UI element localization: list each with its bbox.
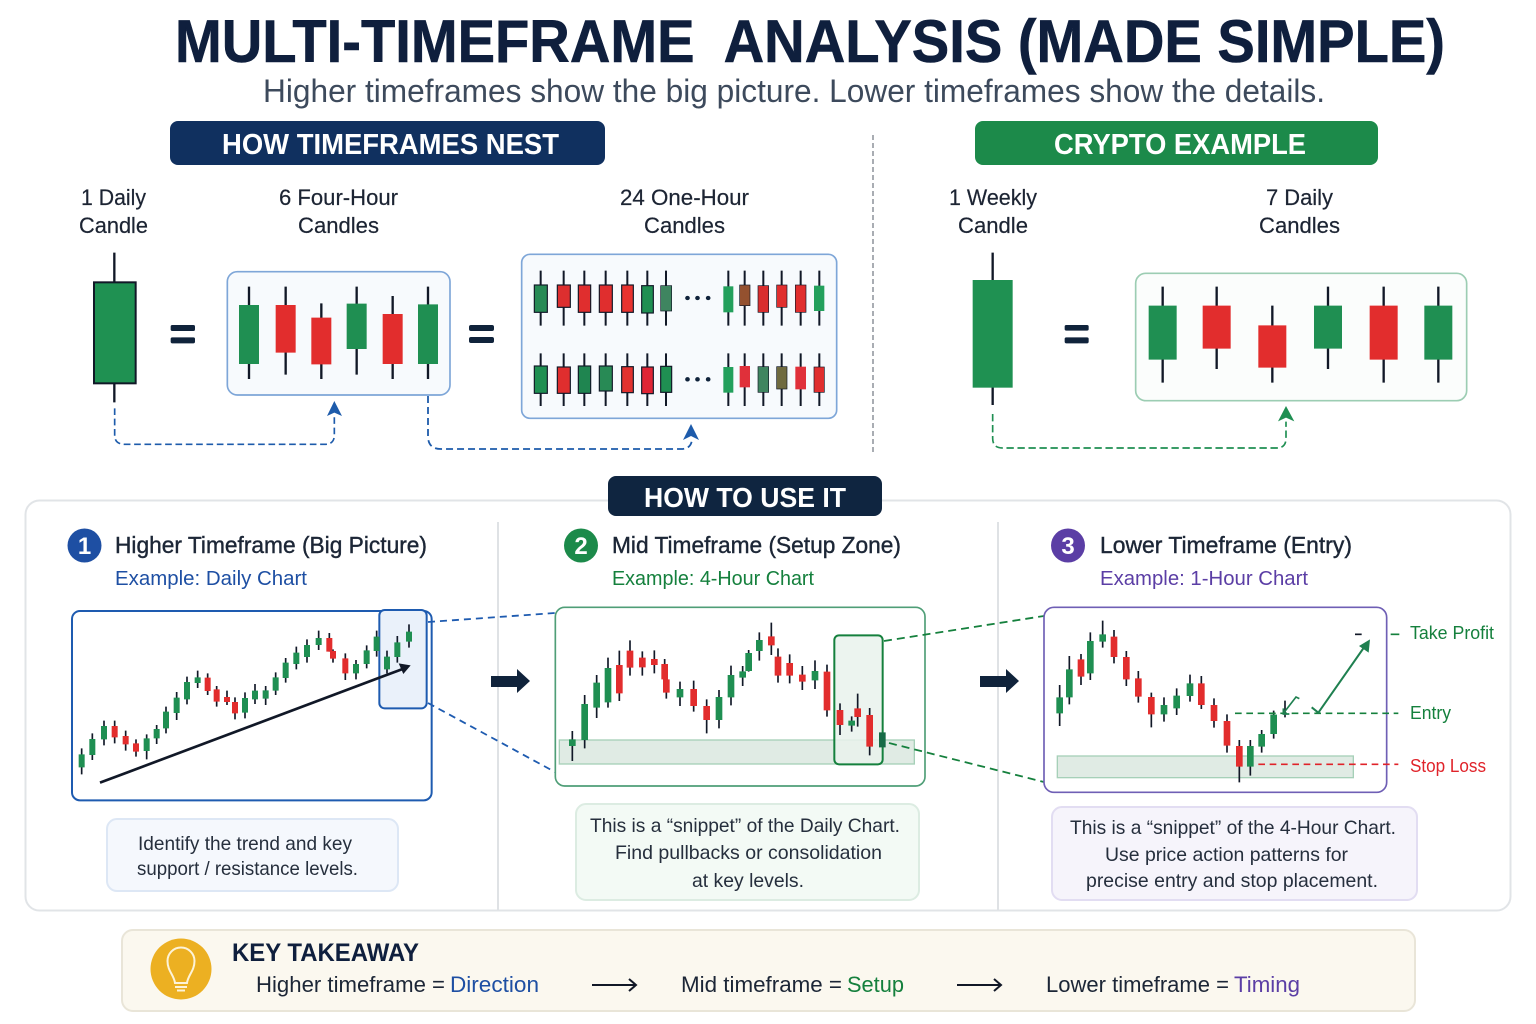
- header: how timeframes nest: [170, 121, 605, 165]
- icon: light bulb: [150, 938, 212, 1000]
- heading tab: [608, 476, 882, 516]
- heading: KEY TAKEAWAY: [232, 939, 419, 967]
- label: 1 daily candle: [79, 185, 148, 238]
- step 3 heading: 3: [1061, 533, 1075, 560]
- icon: equals sign: [1065, 325, 1089, 343]
- callout: step 3 description: Use price action patterns for: [1105, 844, 1348, 866]
- text: timing: Lower timeframe =: [1046, 972, 1229, 997]
- callout: step 2 description: at key levels.: [692, 870, 804, 892]
- step 3 heading: Lower Timeframe (Entry): [1100, 532, 1352, 558]
- text: timing: Timing: [1234, 972, 1300, 997]
- arrow: entry to take profit: [1312, 639, 1370, 713]
- label: 1 weekly candle: 1 Weekly: [949, 185, 1037, 210]
- arrow: step 1 to step 2: [491, 669, 530, 693]
- callout: step 2 description: Find pullbacks or consolidation: [615, 842, 882, 864]
- connector: daily highlight to mid chart: [428, 613, 555, 772]
- candle: last candle on the zone edge: [872, 732, 892, 747]
- step 1 heading: Example: Daily Chart: [115, 567, 307, 590]
- arrow: weekly candle to daily box: [993, 406, 1294, 448]
- chart: one-hour chart: [1044, 607, 1399, 792]
- icon: large daily candle: [94, 253, 136, 402]
- icon: equals sign: [171, 325, 195, 343]
- step 2 heading: 2: [574, 533, 588, 560]
- label: 1 daily candle: Candle: [79, 213, 148, 238]
- text: setup: Setup: [847, 972, 904, 997]
- label: 7 daily candles: Candles: [1259, 213, 1340, 238]
- callout: step 2 description: This is a “snippet” of the Daily Chart.: [590, 815, 900, 837]
- connector: mid highlight to lower chart: [884, 616, 1044, 782]
- panel: twenty-four one-hour candles: [522, 254, 837, 418]
- label: 1 daily candle: 1 Daily: [81, 185, 146, 210]
- arrow: daily candle to four-hour box: [115, 401, 342, 444]
- step 2 heading: Example: 4-Hour Chart: [612, 567, 814, 590]
- step 2 heading: Mid Timeframe (Setup Zone): [612, 532, 901, 558]
- diagram: weekly candle equals seven daily candles: [973, 253, 1467, 448]
- callout: step 1 description: Identify the trend and key: [138, 833, 352, 855]
- step 2 heading: [564, 528, 901, 590]
- label: 6 four-hour candles: [279, 185, 398, 238]
- diagram: daily candle equals six four-hour candles: [94, 253, 450, 444]
- step 3 heading: Example: 1-Hour Chart: [1100, 567, 1308, 590]
- title: MULTI-TIMEFRAME ANALYSIS (MADE SIMPLE): [175, 8, 1445, 75]
- label: 1 weekly candle: Candle: [958, 213, 1028, 238]
- label: 6 four-hour candles: 6 Four-Hour: [279, 185, 398, 210]
- label: stop loss: Stop Loss: [1410, 755, 1486, 776]
- arrow: four-hour box to one-hour box: [428, 396, 699, 449]
- label: 7 daily candles: 7 Daily: [1266, 185, 1333, 210]
- line: take profit tick: [1391, 632, 1399, 637]
- callout: step 3 description: [1052, 807, 1417, 900]
- header: how timeframes nest: HOW TIMEFRAMES NEST: [222, 129, 559, 161]
- arrow: entry marker: [1283, 697, 1299, 714]
- callout: step 3 description: precise entry and stop placement.: [1086, 870, 1378, 892]
- label: entry: Entry: [1410, 702, 1452, 723]
- label: take profit: Take Profit: [1410, 622, 1494, 643]
- text: setup: Mid timeframe =: [681, 972, 842, 997]
- callout: step 3 description: This is a “snippet” of the 4-Hour Chart.: [1070, 817, 1396, 839]
- icon: equals sign: [469, 325, 494, 343]
- label: 24 one-hour candles: Candles: [644, 213, 725, 238]
- text: direction: [256, 972, 539, 997]
- heading tab: HOW TO USE IT: [644, 482, 846, 513]
- chart: daily chart: [72, 610, 432, 800]
- callout: step 1 description: [107, 819, 398, 891]
- label: 6 four-hour candles: Candles: [298, 213, 379, 238]
- arrow: uptrend: [100, 663, 411, 783]
- text: direction: Direction: [450, 972, 539, 997]
- step 1 heading: 1: [78, 533, 91, 560]
- line: entry: [1235, 711, 1398, 716]
- header: crypto example: CRYPTO EXAMPLE: [1054, 129, 1306, 161]
- arrow: direction to setup: [592, 979, 636, 991]
- arrow: setup to timing: [957, 979, 1001, 991]
- icon: large weekly candle: [973, 253, 1013, 405]
- arrow: step 2 to step 3: [980, 669, 1019, 693]
- step 3 heading: [1051, 528, 1352, 590]
- text: direction: Higher timeframe =: [256, 972, 445, 997]
- panel: seven daily candles: [1136, 273, 1467, 401]
- callout: step 1 description: support / resistance levels.: [137, 858, 358, 880]
- panel: key takeaway: [122, 930, 1415, 1011]
- line: stop loss: [1258, 762, 1398, 767]
- label: 24 one-hour candles: 24 One-Hour: [620, 185, 749, 210]
- step 1 heading: Higher Timeframe (Big Picture): [115, 532, 427, 558]
- highlight: snippet window: [834, 635, 883, 764]
- panel: six four-hour candles: [227, 272, 450, 395]
- subtitle: Higher timeframes show the big picture. Lower timeframes show the details.: [263, 73, 1325, 109]
- label: 7 daily candles: [1259, 185, 1340, 238]
- panel: how to use it: [26, 476, 1510, 910]
- label: 1 weekly candle: [949, 185, 1037, 238]
- step 1 heading: [68, 528, 427, 590]
- header: crypto example: [975, 121, 1378, 165]
- chart: four-hour chart: [555, 607, 925, 786]
- label: 24 one-hour candles: [620, 185, 749, 238]
- callout: step 2 description: [576, 804, 919, 900]
